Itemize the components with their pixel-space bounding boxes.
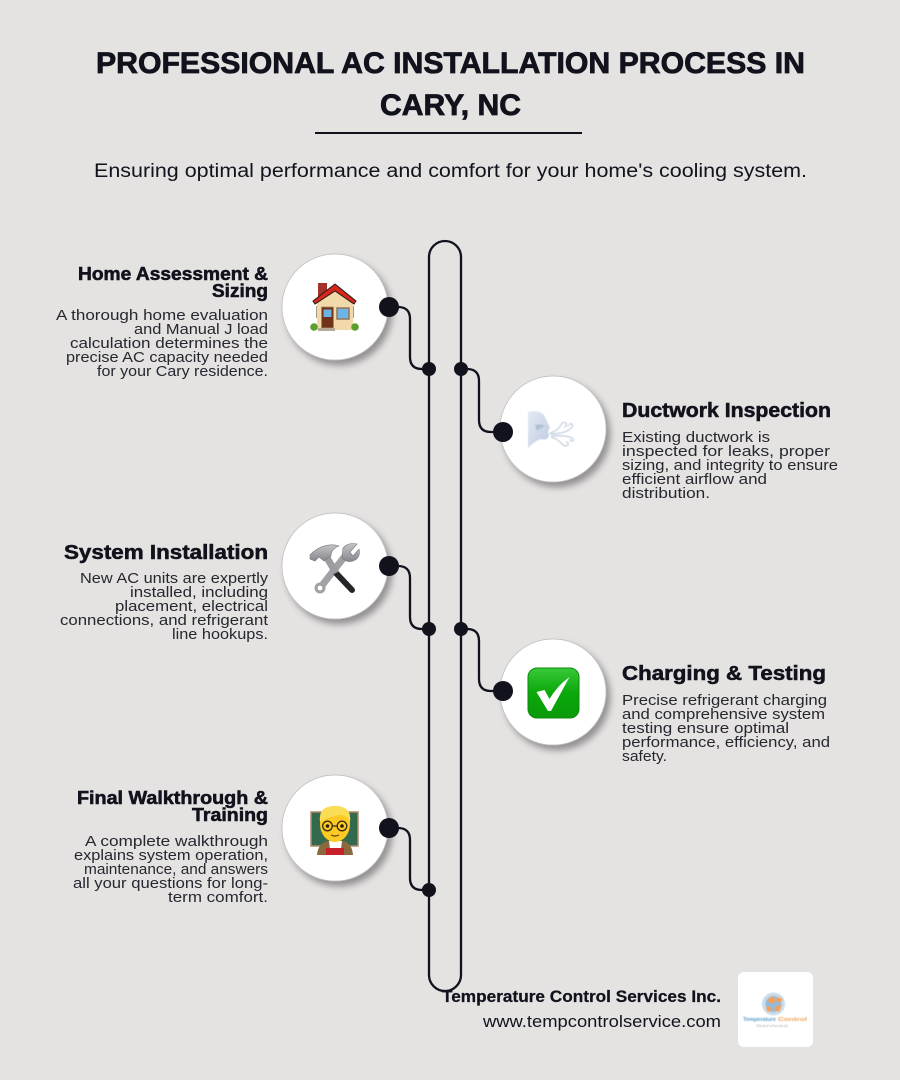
- step 2 text: Existing ductwork is: [622, 430, 770, 446]
- step 2 text: efficient airflow and: [622, 472, 767, 488]
- step 3 connector: [379, 556, 436, 636]
- step 3 circle: [282, 513, 388, 619]
- step 4 text: and comprehensive system: [622, 707, 825, 723]
- step 1: home assessment: [56, 254, 436, 380]
- company logo: Services: [756, 1023, 788, 1028]
- step 5 connector: [379, 818, 436, 897]
- step 3: system installation: [60, 513, 436, 643]
- step 3 text: line hookups.: [172, 627, 268, 643]
- step 2 text: distribution.: [622, 486, 710, 502]
- step 5: final walkthrough: [73, 775, 436, 906]
- icon: check mark: [528, 668, 579, 718]
- step 3 text: [60, 542, 269, 643]
- step 1 circle: [282, 254, 388, 360]
- step 1 text: [56, 264, 268, 380]
- footer website: www.tempcontrolservice.com: [482, 1013, 721, 1031]
- step 2 text: Ductwork Inspection: [622, 400, 831, 422]
- step 5 text: all your questions for long-: [73, 876, 268, 892]
- footer company name: Temperature Control Services Inc.: [442, 988, 721, 1006]
- step 1 text: Sizing: [212, 281, 268, 301]
- step 2 circle: [500, 376, 606, 482]
- step 5 text: Final Walkthrough &: [77, 788, 268, 808]
- icon: house: [310, 283, 359, 331]
- step 1 text: precise AC capacity needed: [66, 350, 268, 366]
- step 4 text: testing ensure optimal: [622, 721, 789, 737]
- step 3 text: System Installation: [64, 542, 268, 564]
- company logo: Control: [778, 1017, 808, 1023]
- title: [96, 47, 805, 122]
- timeline rail: [429, 241, 461, 991]
- icon: hammer and wrench: [310, 544, 359, 594]
- step 1 text: A thorough home evaluation: [56, 308, 268, 324]
- step 3 text: connections, and refrigerant: [60, 613, 268, 629]
- step 5 text: Training: [192, 805, 268, 825]
- step 5 text: term comfort.: [168, 890, 268, 906]
- step 4 circle: [500, 639, 606, 745]
- step 5 text: explains system operation,: [74, 848, 268, 864]
- step 1 text: and Manual J load: [134, 322, 268, 338]
- step 4 text: Precise refrigerant charging: [622, 693, 827, 709]
- step 2 connector: [454, 362, 513, 442]
- step 1 text: Home Assessment &: [78, 264, 268, 284]
- step 1 connector: [379, 297, 436, 376]
- step 4 text: safety.: [622, 749, 667, 765]
- subtitle: Ensuring optimal performance and comfort for your home's cooling system.: [94, 161, 807, 182]
- step 2: ductwork inspection: [454, 362, 838, 502]
- step 4 text: performance, efficiency, and: [622, 735, 830, 751]
- step 4 text: [622, 663, 830, 765]
- step 4: charging and testing: [454, 622, 830, 765]
- step 5 circle: [282, 775, 388, 881]
- company logo: Temperature: [743, 1017, 776, 1023]
- company logo: [738, 972, 813, 1047]
- icon: teacher: [311, 806, 358, 855]
- step 4 connector: [454, 622, 513, 701]
- step 3 text: New AC units are expertly: [80, 571, 269, 587]
- title: PROFESSIONAL AC INSTALLATION PROCESS IN: [96, 47, 805, 80]
- step 2 text: [622, 400, 838, 502]
- icon: wind face: [528, 411, 574, 448]
- step 4 text: Charging & Testing: [622, 663, 826, 685]
- step 5 text: [73, 788, 268, 906]
- title: CARY, NC: [380, 89, 521, 122]
- step 3 text: installed, including: [130, 585, 268, 601]
- step 5 text: maintenance, and answers: [84, 862, 268, 878]
- step 5 text: A complete walkthrough: [85, 834, 268, 850]
- step 1 text: for your Cary residence.: [97, 364, 268, 380]
- step 3 text: placement, electrical: [115, 599, 268, 615]
- step 2 text: inspected for leaks, proper: [622, 444, 830, 460]
- step 2 text: sizing, and integrity to ensure: [622, 458, 838, 474]
- step 1 text: calculation determines the: [70, 336, 268, 352]
